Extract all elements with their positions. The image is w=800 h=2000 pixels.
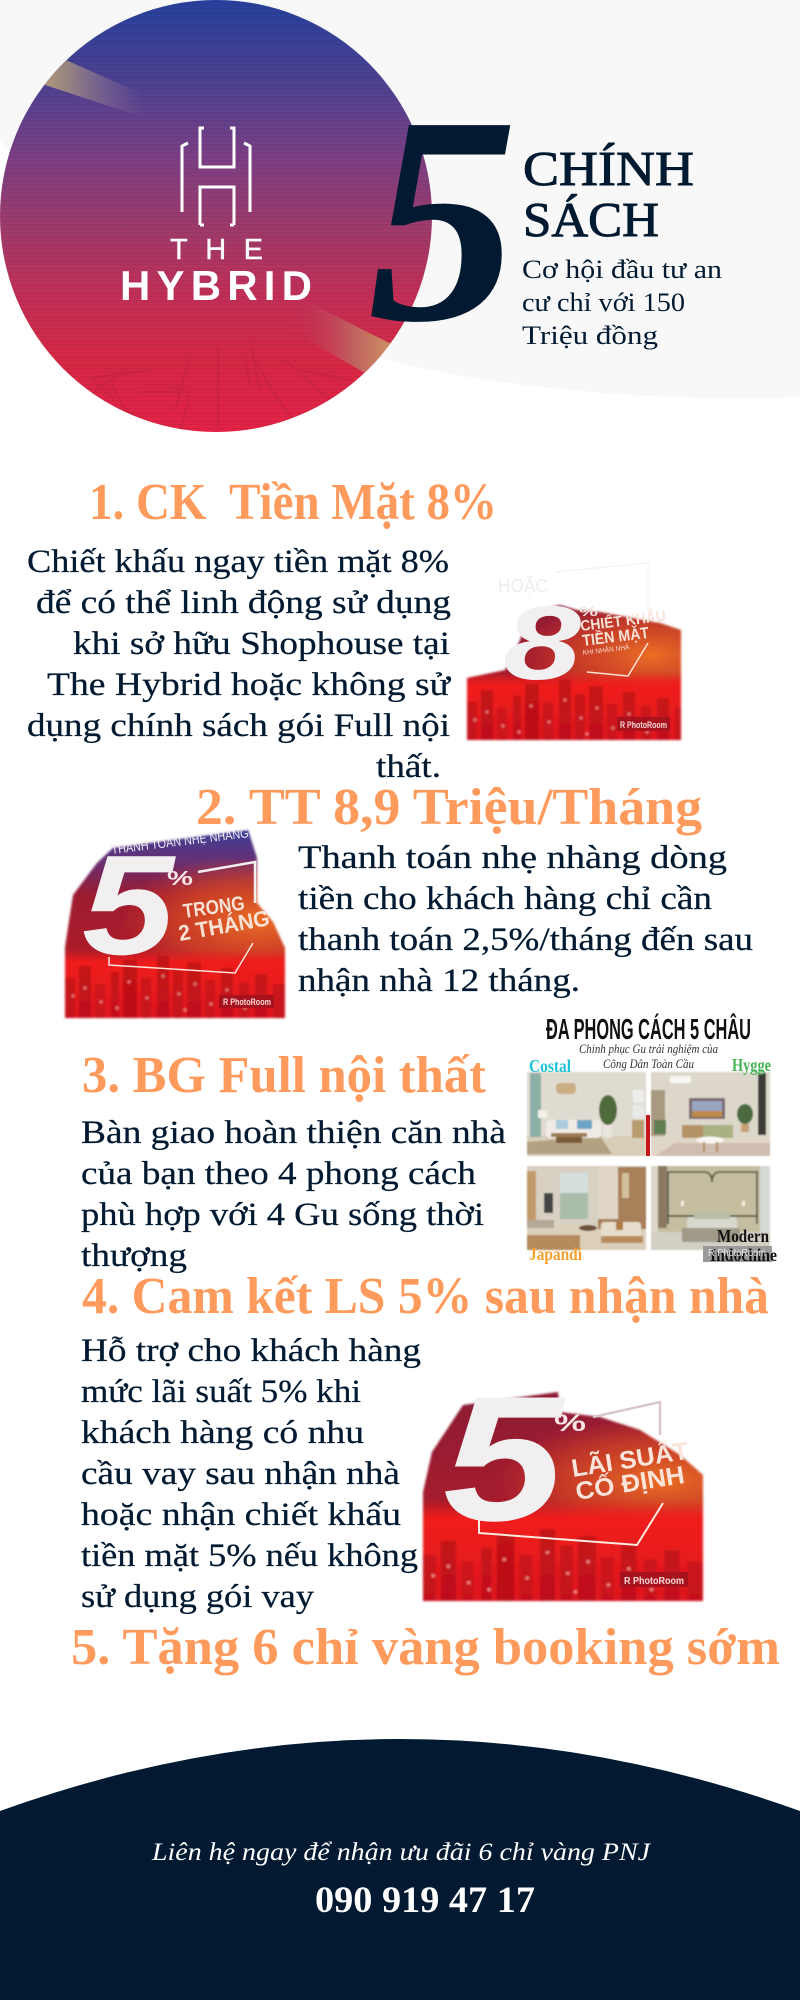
text block: section 1	[27, 544, 451, 785]
image: 8% discount card: CHIẾT KHẤU	[579, 608, 667, 635]
logo wordmark HYBRID: HYBRID	[120, 262, 312, 309]
image: interior styles collage: R PhotoRoom	[708, 1248, 766, 1259]
collage subtitle: Chinh phục Gu trải nghiệm của	[579, 1041, 718, 1056]
label Indochine: Indochine	[710, 1245, 777, 1265]
text block: section 3: của bạn theo 4 phong cách	[81, 1156, 477, 1192]
light streak bottom right	[312, 306, 390, 373]
text block: section 2: nhận nhà 12 tháng.	[298, 963, 580, 999]
footer call to action: Liên hệ ngay để nhận ưu đãi 6 chỉ vàng PNJ	[151, 1839, 652, 1866]
circuit pattern	[90, 342, 350, 430]
text block: section 1: The Hybrid hoặc không sử	[47, 667, 451, 703]
text block: section 1: dụng chính sách gói Full nội	[27, 708, 450, 744]
light streak top left	[44, 60, 133, 113]
text block: section 3: phù hợp với 4 Gu sống thời	[81, 1197, 484, 1233]
photoroom badge	[703, 1246, 772, 1262]
image: 8% discount card: %	[579, 603, 599, 619]
header light grey curved panel	[0, 0, 800, 398]
text block: section 3: thượng	[81, 1238, 187, 1274]
photo: hygge room	[651, 1072, 770, 1156]
image: 8% discount card: KHI NHẬN NHÀ	[582, 642, 630, 657]
image: 8% discount card: TIỀN MẶT	[581, 623, 650, 650]
text block: section 2: thanh toán 2,5%/tháng đến sau	[298, 922, 753, 958]
text block: section 4: tiền mặt 5% nếu không	[81, 1538, 418, 1574]
text block: section 4: Hỗ trợ cho khách hàng	[81, 1333, 421, 1369]
text block: section 1: để có thể linh động sử dụng	[36, 585, 451, 621]
image: 8% discount card: R PhotoRoom	[620, 720, 667, 730]
image: 8% discount card	[460, 563, 687, 745]
text block: section 4	[81, 1333, 421, 1615]
image: 5% fixed interest card	[421, 1390, 705, 1603]
image: 5% in 2 months card: R PhotoRoom	[223, 997, 271, 1007]
subtitle	[522, 255, 722, 350]
collage subtitle: Công Dân Toàn Cầu	[603, 1056, 694, 1071]
image: 5% fixed interest card: R PhotoRoom	[624, 1576, 684, 1587]
text block: section 4: sử dụng gói vay	[81, 1579, 315, 1615]
heading: section 5: 5. Tặng 6 chỉ vàng booking sớm	[71, 1619, 780, 1676]
label Costal: Costal	[529, 1056, 571, 1076]
image: 8% discount card: HOẶC	[498, 576, 548, 596]
top rotated label: THANH TOÁN NHẸ NHÀNG	[111, 825, 249, 857]
heading: section 2: 2. TT 8,9 Triệu/Tháng	[196, 779, 702, 836]
heading: section 3: 3. BG Full nội thất	[82, 1047, 487, 1104]
footer panel	[0, 1739, 800, 2000]
label Modern: Modern	[717, 1226, 769, 1246]
text block: section 4: hoặc nhận chiết khấu	[81, 1497, 401, 1533]
numeral 5: 5	[443, 1359, 567, 1558]
image: 5% fixed interest card: LÃI SUẤT	[569, 1435, 690, 1483]
subtitle: Cơ hội đầu tư an	[522, 255, 722, 284]
text block: section 4: mức lãi suất 5% khi	[81, 1374, 361, 1410]
heading: chính sách	[523, 141, 694, 247]
photo: japandi room	[527, 1166, 646, 1250]
image: 5% fixed interest card: %	[554, 1410, 586, 1437]
heading: chính sách: CHÍNH	[523, 141, 694, 196]
numeral 8: 8	[503, 585, 582, 702]
image: 5% in 2 months card: 2 THÁNG	[177, 905, 271, 946]
text block: section 2: tiền cho khách hàng chỉ cần	[298, 881, 712, 917]
logo mark	[182, 128, 250, 225]
text block: section 4: cầu vay sau nhận nhà	[81, 1456, 400, 1492]
accent sliver between photos	[646, 1115, 650, 1156]
image: 5% in 2 months card: TRONG	[182, 893, 246, 923]
text block: section 2	[298, 840, 753, 999]
image: 5% fixed interest card: CỐ ĐỊNH	[573, 1459, 687, 1506]
label Hygge: Hygge	[732, 1055, 771, 1075]
panel: gradient circle with logo	[0, 0, 432, 432]
big numeral 5: 5	[368, 56, 518, 384]
collage subtitle	[579, 1041, 718, 1071]
text block: section 4: khách hàng có nhu	[81, 1415, 364, 1451]
text block: section 3	[81, 1115, 506, 1274]
frame lines	[198, 862, 255, 903]
logo wordmark THE: THE	[170, 234, 263, 266]
text block: section 1: khi sở hữu Shophouse tại	[73, 626, 450, 662]
photo: indochine bedroom	[651, 1166, 770, 1250]
image: interior styles collage	[527, 1012, 777, 1265]
heading: section 4: 4. Cam kết LS 5% sau nhận nhà	[82, 1268, 769, 1325]
text block: section 1: Chiết khấu ngay tiền mặt 8%	[27, 544, 449, 580]
heading: chính sách: SÁCH	[523, 192, 659, 247]
footer phone number: 090 919 47 17	[315, 1880, 535, 1921]
text block: section 3: Bàn giao hoàn thiện căn nhà	[81, 1115, 506, 1151]
text block: section 2: Thanh toán nhẹ nhàng dòng	[298, 840, 727, 876]
numeral 5: 5	[82, 826, 176, 985]
subtitle: cư chỉ với 150	[522, 288, 685, 317]
heading: section 1: 1. CK Tiền Mặt 8%	[89, 474, 497, 531]
label Japandi: Japandi	[529, 1244, 582, 1264]
text block: section 1: thất.	[376, 749, 441, 785]
image: 5% in 2 months card	[60, 825, 290, 1020]
image: 5% in 2 months card: %	[167, 868, 193, 890]
photo: costal room	[527, 1072, 646, 1156]
subtitle: Triệu đồng	[522, 321, 658, 350]
frame lines	[593, 1402, 660, 1435]
